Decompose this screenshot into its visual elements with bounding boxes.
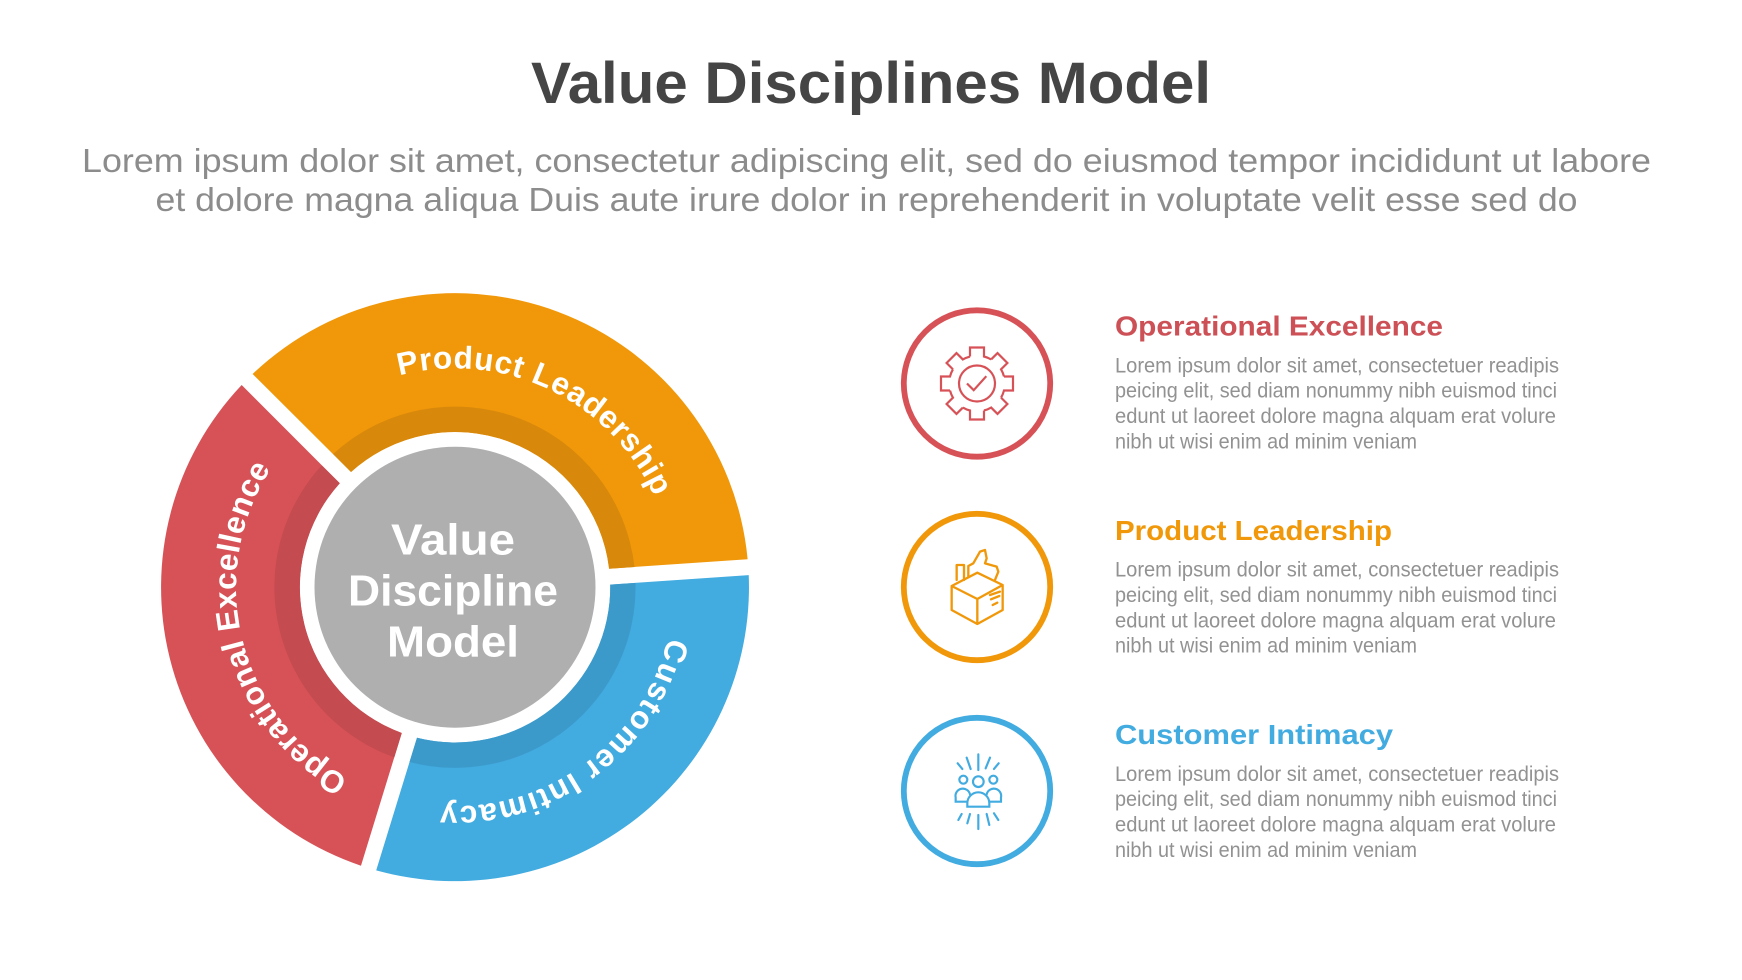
text block: operational excellence: peicing elit, sed diam nonummy nibh euismod tinci (1115, 380, 1557, 403)
donut chart (161, 293, 749, 882)
text block: customer intimacy: Customer Intimacy (1115, 719, 1393, 750)
centre circle: Discipline (348, 566, 558, 616)
text block: operational excellence (1115, 310, 1559, 453)
text block: product leadership: Lorem ipsum dolor sit amet, consectetuer readipis (1115, 559, 1559, 582)
text block: operational excellence: nibh ut wisi enim ad minim veniam (1115, 430, 1417, 453)
text block: customer intimacy: nibh ut wisi enim ad minim veniam (1115, 839, 1417, 862)
segment: operational excellence (161, 385, 402, 866)
subtitle text: et dolore magna aliqua Duis aute irure dolor in reprehenderit in voluptate velit esse sed do (156, 181, 1578, 218)
icon: gear with check in red circle (904, 310, 1050, 457)
title: Value Disciplines Model (531, 51, 1211, 116)
subtitle text (82, 142, 1651, 218)
text block: customer intimacy: Lorem ipsum dolor sit amet, consectetuer readipis (1115, 763, 1559, 786)
text block: product leadership (1115, 515, 1559, 658)
subtitle text: Lorem ipsum dolor sit amet, consectetur adipiscing elit, sed do eiusmod tempor incididunt ut labore (82, 142, 1651, 179)
text block: customer intimacy: peicing elit, sed diam nonummy nibh euismod tinci (1115, 788, 1557, 811)
segment: operational excellence: Operational Excellence (216, 464, 344, 793)
text block: customer intimacy: edunt ut laoreet dolore magna alquam erat volure (1115, 814, 1556, 836)
text block: product leadership: edunt ut laoreet dolore magna alquam erat volure (1115, 609, 1556, 632)
text block: operational excellence: Lorem ipsum dolor sit amet, consectetuer readipis (1115, 354, 1559, 377)
icon: people with rays in blue circle (904, 718, 1050, 864)
centre circle: Model (387, 618, 519, 667)
text block: operational excellence: edunt ut laoreet dolore magna alquam erat volure (1115, 405, 1556, 428)
centre circle: Value (391, 516, 515, 564)
text block: customer intimacy (1115, 719, 1559, 862)
segment: product leadership (252, 293, 748, 569)
segment: customer intimacy: Customer Intimacy (440, 641, 687, 823)
segment: product leadership: Product Leadership (396, 346, 667, 494)
text block: product leadership: peicing elit, sed diam nonummy nibh euismod tinci (1115, 584, 1557, 607)
centre circle (314, 447, 596, 728)
icon: box with thumbs up in orange circle (904, 514, 1050, 660)
text block: operational excellence: Operational Excellence (1115, 310, 1443, 342)
segment: customer intimacy (376, 575, 749, 882)
text block: product leadership: nibh ut wisi enim ad minim veniam (1115, 635, 1417, 658)
text block: product leadership: Product Leadership (1115, 515, 1392, 546)
